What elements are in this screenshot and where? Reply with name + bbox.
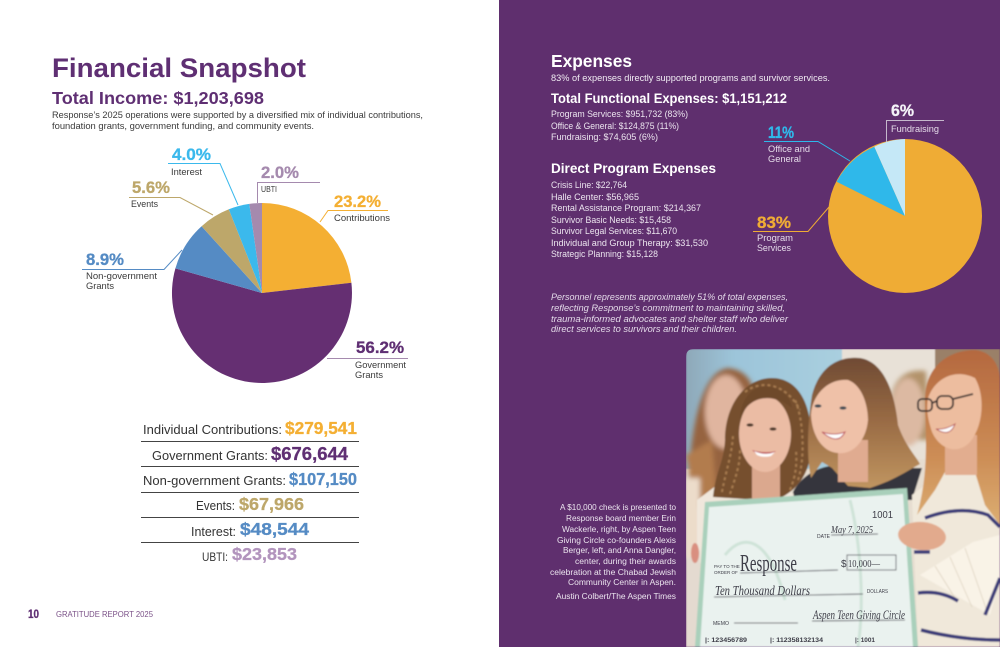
text block: income intro xyxy=(52,109,423,131)
label: events: 5.6% xyxy=(132,179,170,197)
check text: DOLLARS xyxy=(867,589,889,595)
row: events: Events: xyxy=(196,498,235,513)
label: program services: 83% xyxy=(757,214,791,232)
row: non-government grants: Non-government Grants: xyxy=(143,473,286,488)
text block: photo caption: Response board member Erin xyxy=(566,514,676,523)
text block: functional breakdown xyxy=(551,109,688,142)
label: contributions: 23.2% xyxy=(334,193,381,211)
text block: personnel note: reflecting Response’s commitment to maintaining skilled, xyxy=(551,302,785,313)
label: fundraising xyxy=(886,102,944,142)
background girl left xyxy=(686,368,757,558)
label: office and general: General xyxy=(768,153,801,164)
row: interest xyxy=(191,519,309,539)
label: government grants: Grants xyxy=(355,369,383,380)
sweater stripes xyxy=(914,511,1000,640)
curly girl xyxy=(696,486,792,556)
text block: personnel note: trauma-informed advocates and shelter staff who deliver xyxy=(551,313,789,324)
sweater sleeve xyxy=(920,535,1000,615)
text block: photo caption: center, during their awards xyxy=(575,557,676,566)
background: right purple page xyxy=(499,0,1000,647)
footer: report name: GRATITUDE REPORT 2025 xyxy=(56,609,153,619)
text block: photo caption: A $10,000 check is presented to xyxy=(560,503,677,512)
row: events: $67,966 xyxy=(239,494,304,514)
label: government grants: 56.2% xyxy=(356,338,404,357)
heading: total income: Total Income: $1,203,698 xyxy=(52,88,264,108)
chart: expenses pie xyxy=(828,139,982,293)
row: non-government grants: $107,150 xyxy=(289,469,357,489)
chart: income pie xyxy=(172,203,352,383)
text block: direct program list: Strategic Planning: $15,128 xyxy=(551,249,658,259)
row: interest: $48,544 xyxy=(240,519,309,539)
check xyxy=(695,488,918,647)
text block: personnel note xyxy=(551,291,789,334)
row: UBTI: $23,853 xyxy=(232,544,297,564)
label: government grants xyxy=(327,338,408,380)
row: government grants xyxy=(152,444,348,464)
check text: |: 123456789 xyxy=(705,637,747,644)
row: individual contributions xyxy=(143,418,357,438)
row: government grants: Government Grants: xyxy=(152,448,268,463)
label: office and general: Office and xyxy=(768,143,810,154)
label: program services: Program xyxy=(757,232,793,243)
label: events: Events xyxy=(131,198,158,209)
label: non-government grants: Grants xyxy=(86,280,114,291)
label: non-government grants xyxy=(82,250,182,291)
text block: direct program list: Survivor Basic Needs: $15,458 xyxy=(551,215,671,225)
label: UBTI xyxy=(258,164,320,203)
check text: DATE xyxy=(817,534,831,540)
footer: page number: 10 xyxy=(28,609,39,621)
text block: personnel note: Personnel represents approximately 51% of total expenses, xyxy=(551,291,788,302)
check text: 10,000— xyxy=(848,559,881,570)
text block: photo caption: Wackerle, right, by Aspen Teen xyxy=(562,525,676,534)
text block: functional breakdown: Office & General: $124,875 (11%) xyxy=(551,121,679,131)
text block: income intro: foundation grants, government funding, and community events. xyxy=(52,120,314,131)
row: individual contributions: $279,541 xyxy=(285,418,357,438)
check text: Response xyxy=(740,551,797,577)
label: fundraising: Fundraising xyxy=(891,123,939,134)
text block: photo caption: Austin Colbert/The Aspen Times xyxy=(556,592,676,601)
text block: expenses summary: 83% of expenses directly supported programs and survivor services. xyxy=(551,72,830,83)
label: program services xyxy=(753,207,829,253)
check text xyxy=(705,510,905,644)
label: government grants: Government xyxy=(355,359,406,370)
background person right xyxy=(890,371,930,446)
photo: check presentation xyxy=(686,349,1000,647)
check text: May 7, 2025 xyxy=(830,524,873,536)
label: UBTI: UBTI xyxy=(261,185,277,194)
check text: Aspen Teen Giving Circle xyxy=(812,607,905,622)
check text: |: 112358132134 xyxy=(770,637,823,644)
glasses xyxy=(918,394,973,411)
check text: ORDER OF xyxy=(714,570,738,575)
label: UBTI: 2.0% xyxy=(261,164,299,182)
text block: photo caption xyxy=(550,503,677,601)
hand xyxy=(897,520,947,552)
label: fundraising: 6% xyxy=(891,102,914,120)
check text: MEMO xyxy=(713,621,730,627)
label: contributions xyxy=(320,193,390,223)
text block: photo caption: Giving Circle co-founders Alexis xyxy=(557,536,676,545)
text block: functional breakdown: Program Services: $951,732 (83%) xyxy=(551,109,688,119)
text block: personnel note: direct services to survivors and their children. xyxy=(551,323,737,334)
text block: direct program list: Halle Center: $56,965 xyxy=(551,192,639,202)
check text: 1001 xyxy=(872,510,893,521)
label: office and general: 11% xyxy=(768,124,794,142)
text block: direct program list: Individual and Group Therapy: $31,530 xyxy=(551,238,708,248)
text block: direct program list: Rental Assistance Program: $214,367 xyxy=(551,203,701,213)
heading: total functional expenses: Total Functional Expenses: $1,151,212 xyxy=(551,90,787,106)
row: government grants: $676,644 xyxy=(271,444,348,464)
table: income amounts xyxy=(141,418,359,564)
label: events xyxy=(129,179,213,215)
row: UBTI: UBTI: xyxy=(202,550,228,564)
check text: $ xyxy=(841,559,847,570)
heading: expenses: Expenses xyxy=(551,51,632,71)
label: program services: Services xyxy=(757,242,791,253)
text block: functional breakdown: Fundraising: $74,605 (6%) xyxy=(551,132,658,142)
label: contributions: Contributions xyxy=(334,212,390,223)
text block: photo caption: Community Center in Aspen. xyxy=(568,578,676,587)
row: UBTI xyxy=(202,544,297,564)
label: interest xyxy=(168,146,238,205)
check text: |: 1001 xyxy=(855,637,875,644)
label: office and general xyxy=(764,124,850,164)
text block: photo caption: Berger, left, and Anna Dangler, xyxy=(563,546,676,555)
title: Financial Snapshot xyxy=(52,53,306,83)
check text: PAY TO THE xyxy=(714,564,740,569)
text block: income intro: Response’s 2025 operations were supported by a diversified mix of individual contributions, xyxy=(52,109,423,120)
row: events xyxy=(196,494,304,514)
label: interest: Interest xyxy=(171,166,202,177)
row: non-government grants xyxy=(143,469,357,489)
row: interest: Interest: xyxy=(191,524,236,539)
heading: direct program expenses: Direct Program Expenses xyxy=(551,161,716,176)
row: individual contributions: Individual Contributions: xyxy=(143,422,282,437)
label: non-government grants: Non-government xyxy=(86,270,157,281)
text block: direct program list xyxy=(551,180,708,259)
text block: direct program list: Crisis Line: $22,764 xyxy=(551,180,627,190)
label: non-government grants: 8.9% xyxy=(86,251,124,269)
text block: photo caption: celebration at the Chabad Jewish xyxy=(550,568,676,577)
check text: Ten Thousand Dollars xyxy=(715,584,810,599)
woman with glasses xyxy=(912,470,1000,647)
center girl xyxy=(793,466,922,500)
label: interest: 4.0% xyxy=(172,146,211,164)
text block: direct program list: Survivor Legal Services: $11,670 xyxy=(551,226,677,236)
